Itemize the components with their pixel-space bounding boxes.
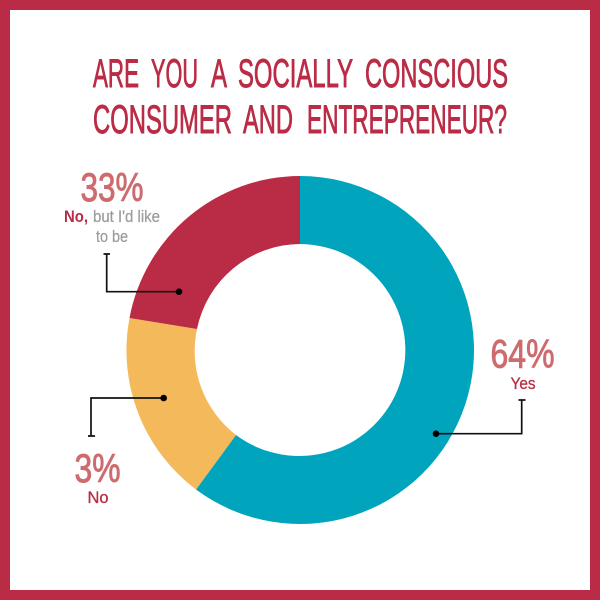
title: A — [211, 52, 227, 96]
title: SOCIALLY — [238, 52, 353, 96]
label: 3% No: 3% — [74, 447, 120, 491]
title: AND — [243, 98, 293, 142]
title: CONSCIOUS — [365, 52, 508, 96]
label: 33% No, but I'd like to be — [64, 166, 160, 246]
label: 3% No — [74, 447, 120, 507]
leader line: No — [88, 395, 167, 436]
title: CONSUMER — [93, 98, 232, 142]
segment: Yes 64% — [196, 176, 474, 524]
title — [93, 52, 508, 142]
leader line: No, but I'd like to be — [104, 254, 182, 295]
label: 33% No, but I'd like to be: to be — [96, 228, 128, 246]
title: ARE — [93, 52, 139, 96]
segment: No 3% — [126, 318, 236, 490]
label: 3% No: No — [88, 489, 108, 507]
label: 33% No, but I'd like to be: but I'd like — [93, 208, 160, 226]
label: 64% Yes: 64% — [490, 332, 554, 376]
donut chart — [126, 176, 474, 524]
label: 33% No, but I'd like to be: No, — [64, 208, 88, 226]
title: YOU — [151, 52, 198, 96]
label: 33% No, but I'd like to be: 33% — [80, 166, 144, 210]
label: 64% Yes: Yes — [510, 375, 536, 393]
leader line: Yes — [433, 400, 526, 437]
segment: No, but I'd like to be 33% — [130, 176, 300, 329]
label: 64% Yes — [490, 332, 554, 393]
